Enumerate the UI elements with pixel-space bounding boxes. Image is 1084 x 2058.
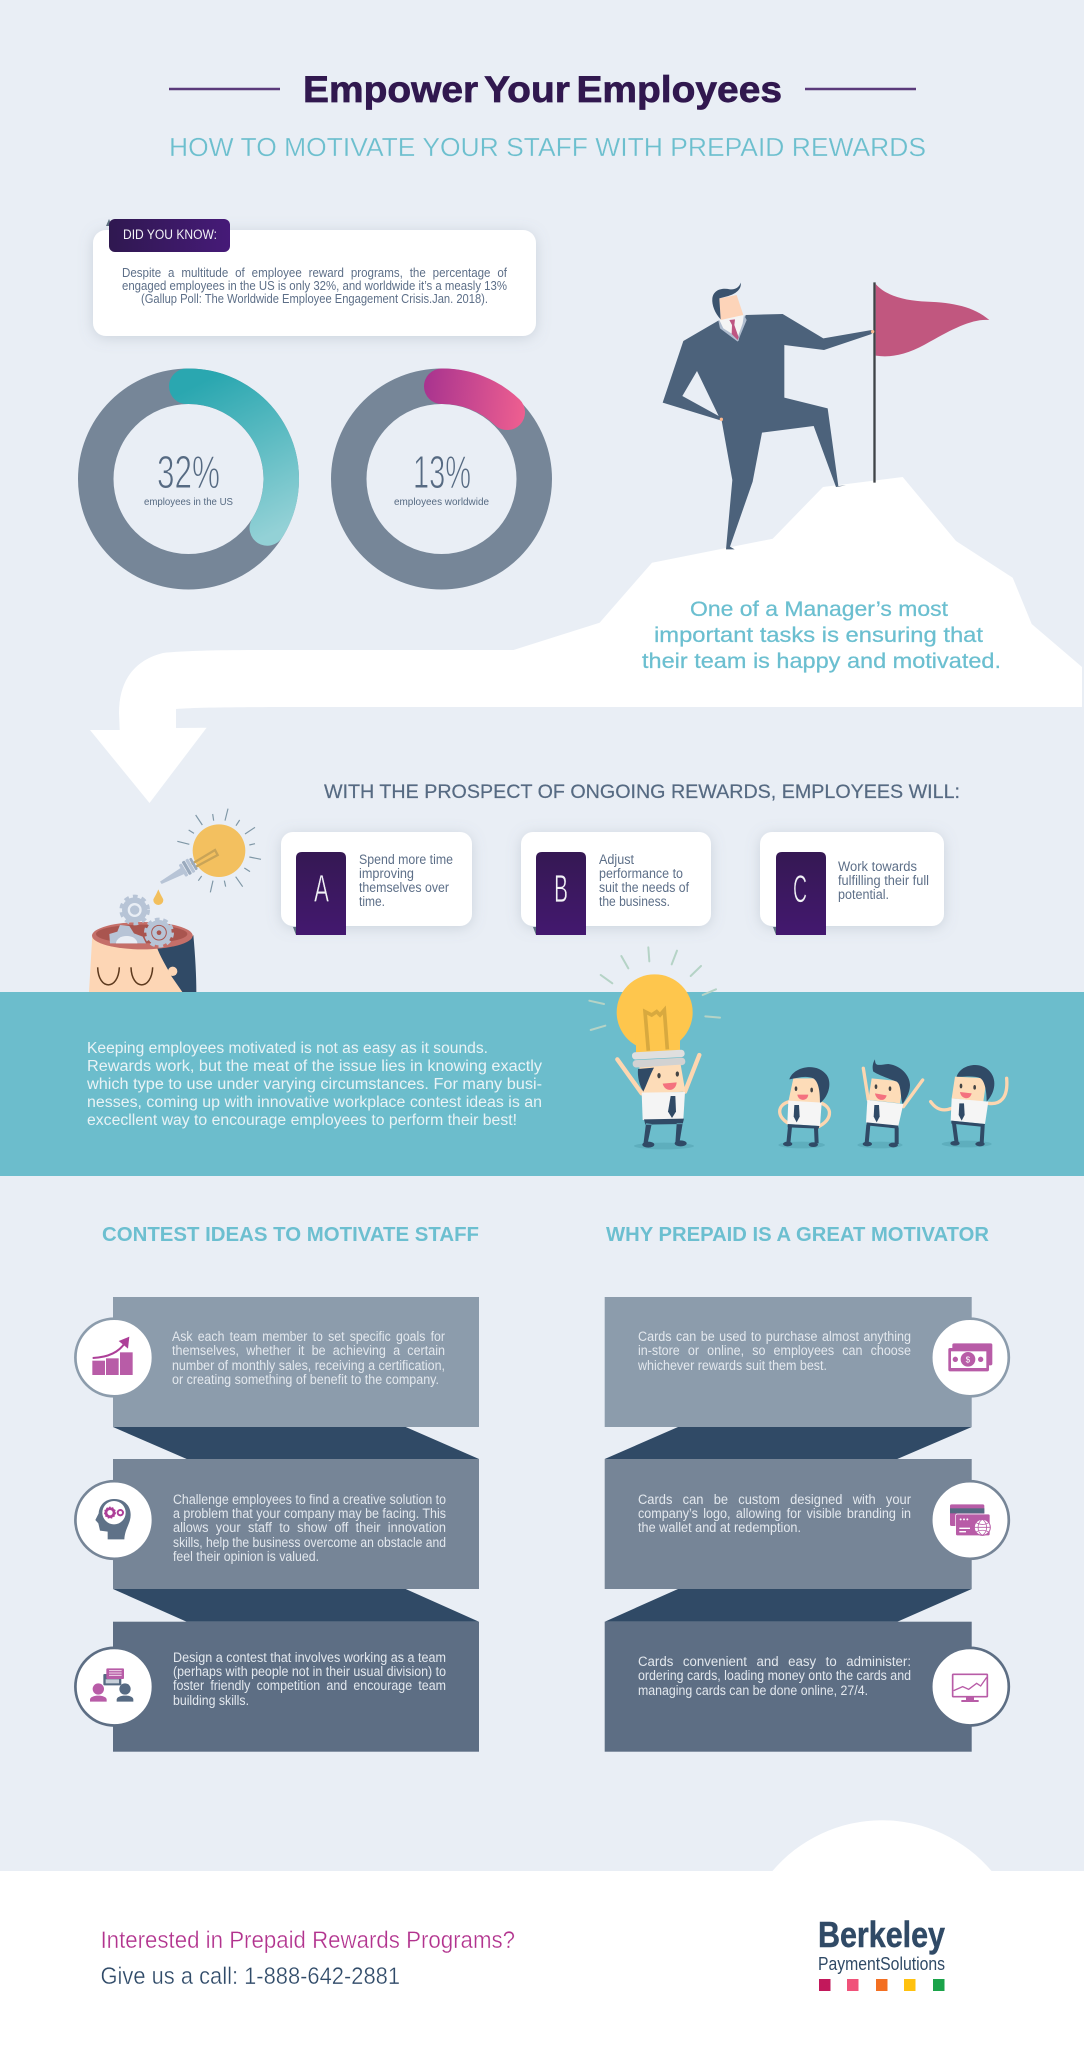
ribbon step 1: whichever rewards suit them best.: [637, 1358, 827, 1373]
banner text: which type to use under varying circumstances. For many busi-: [86, 1076, 542, 1093]
head: [89, 922, 196, 992]
ribbon step 2: Challenge employees to find a creative solution to: [173, 1492, 446, 1507]
big bulb: [617, 974, 693, 1068]
illustration: head with gears and bulb: [89, 809, 261, 992]
mountain text: [642, 598, 1001, 673]
icon: cash: $: [966, 1355, 971, 1364]
mountain text: One of a Manager’s most: [690, 598, 948, 621]
panel: why prepaid ribbon: [605, 1297, 1009, 1752]
banner text: nesses, coming up with innovative workplace contest ideas is an: [87, 1094, 542, 1111]
banner text: Keeping employees motivated is not as easy as it sounds.: [87, 1040, 488, 1057]
ribbon step 3: managing cards can be done online, 27/4.: [638, 1683, 868, 1698]
icon: cards and globe: [950, 1504, 990, 1536]
ribbon step 3: [605, 1622, 1009, 1752]
card C text: Work towards: [838, 859, 917, 874]
light bulb: [160, 824, 245, 884]
ribbon step 2: Cards can be custom designed with your: [638, 1492, 911, 1507]
ribbon step 2: allows your staff to show off their innovation: [173, 1520, 446, 1535]
letter tab A: [293, 852, 346, 935]
donut chart: 13%: 13%: [413, 446, 471, 498]
ribbon step 3: ordering cards, loading money onto the cards and: [638, 1668, 911, 1683]
figure C: [931, 1065, 1007, 1147]
card B: [521, 832, 711, 935]
ribbon step 1: Ask each team member to set specific goals for: [172, 1329, 445, 1344]
letter tab C: [773, 852, 826, 935]
card A text: themselves over: [359, 880, 449, 895]
panel: contest ideas ribbon: [75, 1297, 479, 1752]
ribbon step 1: [605, 1297, 1009, 1427]
card C text: potential.: [838, 887, 889, 902]
teal banner: [0, 992, 1084, 1176]
letter tab B: B: [554, 868, 568, 911]
figure holding bulb: [617, 1055, 699, 1149]
card A text: improving: [359, 866, 414, 881]
subtitle: HOW TO MOTIVATE YOUR STAFF WITH PREPAID REWARDS: [169, 132, 926, 162]
donut chart: 13%: employees worldwide: [394, 496, 489, 508]
flag: [874, 282, 989, 483]
illustration: manager with flag: [663, 282, 989, 549]
letter tab A: A: [314, 868, 329, 911]
mountain text: important tasks is ensuring that: [654, 624, 983, 647]
card C: [760, 832, 944, 935]
bulb rays: [177, 809, 261, 892]
card B text: the business.: [599, 894, 670, 909]
ribbon step 1: number of monthly sales, receiving a certification,: [172, 1358, 445, 1373]
gears: [109, 897, 172, 946]
ribbon step 3: building skills.: [173, 1693, 249, 1708]
heading: contest ideas: CONTEST IDEAS TO MOTIVATE STAFF: [102, 1224, 479, 1246]
ribbon step 1: in-store or online, so employees can choose: [638, 1343, 911, 1358]
card A: [281, 832, 472, 935]
did you know tab: DID YOU KNOW:: [123, 227, 217, 242]
card A text: time.: [359, 894, 385, 909]
did you know text: [122, 266, 507, 306]
did you know text: engaged employees in the US is only 32%, and worldwide it’s a measly 13%: [122, 279, 507, 293]
donut chart: 32%: employees in the US: [144, 496, 233, 508]
heading: ongoing rewards: WITH THE PROSPECT OF ONGOING REWARDS, EMPLOYEES WILL:: [324, 781, 960, 803]
ribbon step 3: Cards convenient and easy to administer:: [638, 1654, 911, 1669]
card A text: Spend more time: [359, 852, 453, 867]
ribbon step 2: feel their opinion is valued.: [173, 1549, 319, 1564]
letter tab C: C: [793, 868, 807, 911]
donut chart: 32%: [96, 386, 281, 572]
footer: [0, 1820, 1084, 2058]
call to action: Interested in Prepaid Rewards Programs?: [100, 1927, 515, 1954]
ribbon step 3: Design a contest that involves working as a team: [173, 1650, 446, 1665]
rays: [589, 947, 720, 1030]
droplet: [153, 889, 163, 905]
ribbon step 2: a problem that your company may be facing. This: [173, 1506, 446, 1521]
ribbon step 2: skills, help the business overcome an obstacle and: [173, 1535, 446, 1550]
logo: Berkeley: [818, 1914, 945, 1955]
ribbon step 2: [75, 1459, 479, 1589]
did you know text: (Gallup Poll: The Worldwide Employee Engagement Crisis.Jan. 2018).: [141, 292, 488, 306]
banner text: excecllent way to encourage employees to perform their best!: [87, 1112, 517, 1129]
title: Empower Your Employees: [303, 69, 782, 110]
icon: monitor with graph: [953, 1674, 987, 1702]
ribbon step 1: Cards can be used to purchase almost anything: [638, 1329, 911, 1344]
ribbon step 2: company’s logo, allowing for visible branding in: [638, 1506, 911, 1521]
card B text: performance to: [599, 866, 683, 881]
mountain text: their team is happy and motivated.: [642, 650, 1001, 673]
ribbon step 3: [75, 1622, 479, 1752]
card B text: Adjust: [599, 852, 634, 867]
mountain with arrow: [90, 477, 1082, 803]
illustration: team with light bulb: [589, 947, 1007, 1149]
donut chart: 13%: [349, 386, 534, 572]
did you know text: Despite a multitude of employee reward programs, the percentage of: [122, 266, 507, 280]
icon: growth chart: [92, 1337, 133, 1375]
icon: team discussion: [90, 1668, 133, 1702]
banner text: [86, 1040, 542, 1129]
ribbon step 2: [605, 1459, 1009, 1589]
card C text: fulfilling their full: [838, 873, 929, 888]
figure B: [857, 1059, 923, 1148]
card C text: [838, 859, 929, 902]
logo: PaymentSolutions: [818, 1954, 945, 1974]
ribbon step 3: foster friendly competition and encourage team: [173, 1678, 446, 1693]
banner text: Rewards work, but the meat of the issue lies in knowing exactly: [87, 1058, 542, 1075]
did you know tab: [106, 219, 230, 252]
ribbon step 1: themselves, whether it be achieving a certain: [172, 1343, 445, 1358]
figure A: [778, 1067, 829, 1148]
icon: cash: [948, 1343, 992, 1371]
manager figure: [663, 283, 874, 549]
logo: [818, 1914, 945, 1991]
heading: why prepaid: WHY PREPAID IS A GREAT MOTIVATOR: [606, 1224, 990, 1246]
card A text: [359, 852, 453, 909]
ribbon step 2: the wallet and at redemption.: [638, 1520, 801, 1535]
ribbon step 1: or creating something of benefit to the company.: [172, 1372, 439, 1387]
panel: did you know: [93, 219, 536, 336]
ribbon step 3: (perhaps with people not in their usual division) to: [173, 1664, 446, 1679]
ribbon step 1: [75, 1297, 479, 1427]
call to action: [100, 1927, 515, 1990]
call to action: Give us a call: 1-888-642-2881: [100, 1963, 400, 1990]
card B text: [599, 852, 689, 909]
donut chart: 32%: 32%: [157, 446, 220, 498]
letter tab B: [533, 852, 586, 935]
card B text: suit the needs of: [599, 880, 689, 895]
icon: head with gears: [95, 1499, 131, 1539]
